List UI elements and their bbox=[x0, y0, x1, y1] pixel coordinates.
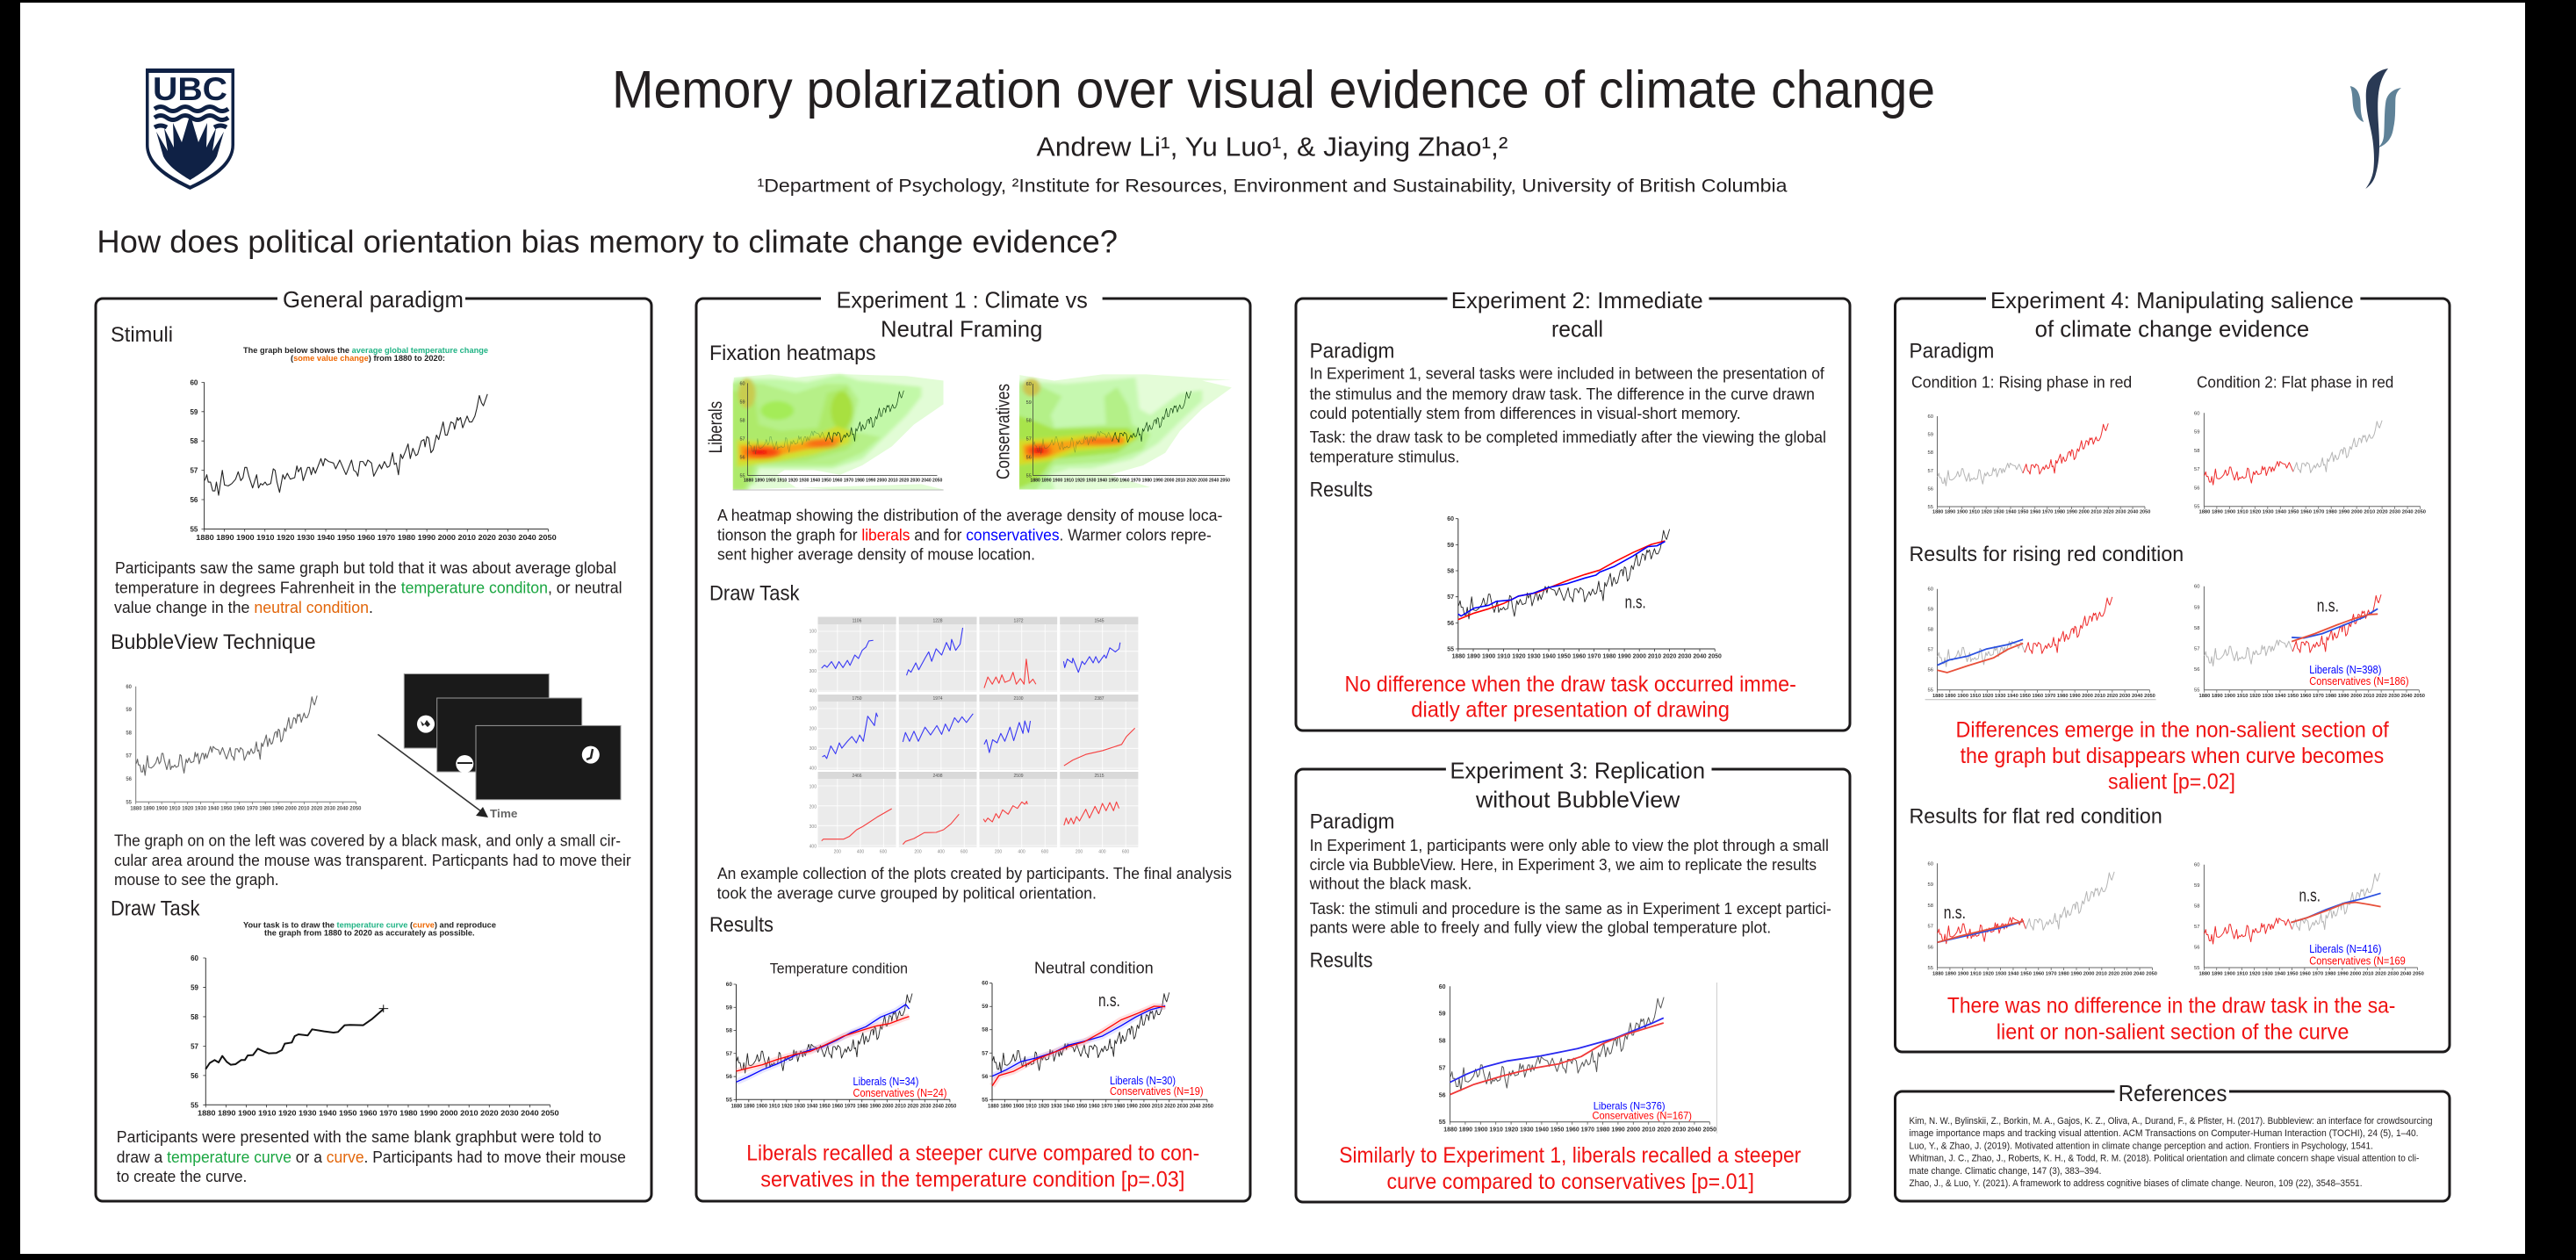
heatmap: liberals: 57 bbox=[739, 436, 745, 442]
chart: rising red, salient section: 55 bbox=[2194, 688, 2200, 694]
heading: draw task: Draw Task bbox=[709, 582, 800, 606]
chart: experiment 3 results bbox=[1439, 983, 1716, 1134]
stimulus instruction text: The graph below shows the average global temperature change bbox=[243, 346, 488, 356]
chart: experiment 2 results: 1880 1890 1900 1910 1920 1930 1940 1950 1960 1970 1980 1990 2000 2010 2020 2030 2040 2050 bbox=[1452, 653, 1722, 659]
chart: facet grid of participant drawings: 600 bbox=[1041, 850, 1048, 855]
chart: stimulus temperature curve: 1880 1890 1900 1910 1920 1930 1940 1950 1960 1970 1980 1990 2000 2010 2020 2030 2040 2050 bbox=[196, 534, 557, 542]
chart: bubbleview graph bbox=[126, 685, 362, 812]
chart: facet grid of participant drawings: 400 bbox=[809, 845, 817, 850]
panel title: experiment 1: Experiment 1 : Climate vs bbox=[837, 287, 1088, 313]
legend: rising red condition: Conservatives (N=186) bbox=[2309, 674, 2409, 688]
chart: facet grid of participant drawings: 200 bbox=[834, 850, 841, 855]
draw task instruction text bbox=[243, 921, 496, 939]
heading: fixation heatmaps: Fixation heatmaps bbox=[709, 342, 876, 365]
chart: flat phase in red stimulus: 60 bbox=[2194, 411, 2200, 416]
legend: neutral condition: Liberals (N=30) bbox=[1110, 1074, 1176, 1087]
chart: flat red, salient section: n.s. bbox=[1944, 904, 1966, 923]
chart: facet grid of participant drawings: 400 bbox=[1018, 850, 1025, 855]
chart: rising phase in red stimulus bbox=[1928, 414, 2150, 515]
chart: neutral condition results: 57 bbox=[982, 1050, 989, 1056]
text: heatmap description: tionson the graph for liberals and for conservatives. Warmer colors repre- bbox=[717, 525, 1212, 544]
text: experiment 2 paradigm: could potentially stem from differences in visual-short memory. bbox=[1310, 404, 1741, 422]
chart: facet grid of participant drawings: 200 bbox=[914, 850, 922, 855]
legend: neutral condition: Conservatives (N=19) bbox=[1110, 1084, 1203, 1098]
chart: rising red, salient section: 60 bbox=[2194, 585, 2200, 590]
conclusion: experiment 1: servatives in the temperature condition [p=.03] bbox=[760, 1168, 1184, 1192]
text: reference list: Luo, Y., & Zhao, J. (2019). Motivated attention in climate change perception and action. Frontiers in Psychology, 1541. bbox=[1909, 1141, 2373, 1151]
panel title: experiment 2: recall bbox=[1551, 315, 1603, 342]
chart: flat red, salient section bbox=[1928, 861, 2157, 977]
label: condition 1: Condition 1: Rising phase in red bbox=[1911, 373, 2132, 392]
chart: facet grid of participant drawings bbox=[809, 616, 1139, 855]
heatmap: conservatives: 57 bbox=[1026, 437, 1032, 443]
chart: rising phase in red stimulus: 60 bbox=[1928, 414, 1933, 420]
chart: facet grid of participant drawings: 400 bbox=[809, 689, 817, 695]
chart: facet grid of participant drawings: 300 bbox=[809, 746, 817, 752]
conclusion: experiment 2: diatly after presentation of drawing bbox=[1411, 698, 1730, 723]
panel: experiment 4 bbox=[1895, 287, 2450, 1052]
chart: rising phase in red stimulus: 57 bbox=[1928, 469, 1933, 474]
legend: flat red condition: Liberals (N=416) bbox=[2309, 942, 2381, 955]
chart: flat red, non-salient section: 59 bbox=[2194, 883, 2200, 889]
chart: neutral condition results: 58 bbox=[982, 1027, 989, 1033]
chart: experiment 3 results: 55 bbox=[1439, 1120, 1446, 1126]
chart: stimulus temperature curve: 57 bbox=[190, 467, 198, 475]
heatmap: conservatives: 55 bbox=[1026, 473, 1032, 479]
chart: rising red, non-salient section: 60 bbox=[1928, 587, 1933, 593]
text: experiment 2 paradigm: Task: the draw task to be completed immediatly after the viewing the global bbox=[1310, 428, 1826, 446]
chart: flat red, non-salient section: 60 bbox=[2194, 863, 2200, 868]
chart: example drawn curve: 59 bbox=[191, 983, 199, 992]
chart: rising red, salient section: 58 bbox=[2194, 626, 2200, 631]
text: bubbleview description: The graph on on the left was covered by a black mask, and only a small cir- bbox=[114, 831, 621, 849]
panel: experiment 2 bbox=[1296, 287, 1850, 731]
text: reference list: mate change. Climatic change, 147 (3), 383–394. bbox=[1909, 1166, 2101, 1177]
panel title: experiment 4 bbox=[1990, 287, 2354, 342]
chart: facet grid of participant drawings: 400 bbox=[1098, 850, 1106, 855]
panel: experiment 3 bbox=[1296, 758, 1850, 1202]
chart: facet grid of participant drawings: 1372 bbox=[1013, 619, 1024, 624]
panel title: experiment 1 bbox=[837, 287, 1088, 342]
chart: flat red, non-salient section: 57 bbox=[2194, 925, 2200, 930]
text: reference list bbox=[1909, 1116, 2432, 1189]
text: draw task description: to create the curve. bbox=[117, 1167, 247, 1185]
heading: results: Results bbox=[709, 913, 774, 937]
text: experiment 2 paradigm: the stimulus and the memory draw task. The difference in the curve drawn bbox=[1310, 385, 1815, 403]
panel: experiment 1 bbox=[696, 287, 1250, 1201]
chart: example drawn curve: 56 bbox=[191, 1072, 199, 1080]
title: Memory polarization over visual evidence of climate change bbox=[612, 61, 1935, 119]
research question heading: How does political orientation bias memory to climate change evidence? bbox=[97, 223, 1118, 259]
text: stimulus description bbox=[114, 558, 622, 616]
chart: rising phase in red stimulus: 59 bbox=[1928, 433, 1933, 438]
heatmap: liberals: 55 bbox=[739, 473, 745, 479]
chart: rising red, non-salient section: 56 bbox=[1928, 668, 1933, 673]
panel title: experiment 2 bbox=[1451, 287, 1703, 342]
chart: flat red, non-salient section: 56 bbox=[2194, 945, 2200, 950]
chart: rising phase in red stimulus: 56 bbox=[1928, 486, 1933, 492]
diagram: bubbleview mask screens over time: Time bbox=[490, 807, 518, 820]
chart: experiment 3 results: 59 bbox=[1439, 1012, 1446, 1018]
text: experiment 2 paradigm bbox=[1310, 364, 1826, 466]
chart: neutral condition results: 1880 1890 1900 1910 1920 1930 1940 1950 1960 1970 1980 1990 2000 2010 2020 2030 2040 2050 bbox=[988, 1104, 1213, 1110]
text: experiment 3 paradigm: without the black mask. bbox=[1309, 875, 1471, 893]
heading: paradigm: Paradigm bbox=[1909, 339, 1994, 363]
chart: facet grid of participant drawings: 1228 bbox=[932, 619, 943, 624]
chart: facet grid of participant drawings: 200 bbox=[809, 804, 817, 810]
conclusion: rising red condition: the graph but disappears when curve becomes bbox=[1961, 744, 2384, 768]
legend: rising red condition: Liberals (N=398) bbox=[2309, 663, 2381, 676]
legend: neutral condition bbox=[1110, 1074, 1203, 1098]
conclusion: experiment 2: No difference when the draw task occurred imme- bbox=[1345, 673, 1796, 697]
chart: facet grid of participant drawings: 200 bbox=[809, 650, 817, 655]
chart: stimulus temperature curve: 55 bbox=[190, 525, 198, 534]
legend: flat red condition bbox=[2309, 942, 2406, 967]
chart: facet grid of participant drawings: 400 bbox=[809, 767, 817, 772]
panel title: references: References bbox=[2119, 1080, 2227, 1106]
chart: rising red, salient section: 1880 1890 1900 1910 1920 1930 1940 1950 1960 1970 1980 1990 2000 2010 2020 2030 2040 2050 bbox=[2198, 694, 2425, 699]
heading: paradigm: Paradigm bbox=[1310, 339, 1394, 363]
chart: facet grid of participant drawings: 600 bbox=[880, 850, 887, 855]
chart: experiment 3 results: 60 bbox=[1439, 984, 1446, 990]
chart: example drawn curve: 57 bbox=[191, 1043, 199, 1051]
legend: temperature condition: Liberals (N=34) bbox=[853, 1075, 918, 1088]
chart: rising red, salient section: n.s. bbox=[2317, 597, 2339, 616]
text: bubbleview description bbox=[114, 831, 631, 889]
chart: rising red, salient section: 59 bbox=[2194, 605, 2200, 610]
affiliations: ¹Department of Psychology, ²Institute for Resources, Environment and Sustainability, University of British Columbia bbox=[757, 175, 1788, 196]
chart: rising red, non-salient section: 58 bbox=[1928, 628, 1933, 633]
chart title: neutral condition: Neutral condition bbox=[1034, 959, 1154, 976]
chart: flat red, salient section: 59 bbox=[1928, 882, 1933, 888]
chart: facet grid of participant drawings: 600 bbox=[961, 850, 968, 855]
chart: flat red, non-salient section: 1880 1890 1900 1910 1920 1930 1940 1950 1960 1970 1980 1990 2000 2010 2020 2030 2040 2050 bbox=[2198, 972, 2424, 977]
chart: stimulus temperature curve: 59 bbox=[190, 408, 198, 416]
stimulus instruction text bbox=[243, 346, 488, 364]
chart: experiment 2 results bbox=[1447, 516, 1722, 659]
label: liberals: Liberals bbox=[706, 401, 726, 453]
text: draw task example description bbox=[717, 864, 1232, 902]
chart: bubbleview graph: 60 bbox=[126, 685, 133, 690]
chart: facet grid of participant drawings: 2387 bbox=[1094, 696, 1105, 702]
chart: temperature condition results: 1880 1890 1900 1910 1920 1930 1940 1950 1960 1970 1980 1990 2000 2010 2020 2030 2040 2050 bbox=[731, 1104, 957, 1110]
panel title: general paradigm: General paradigm bbox=[283, 286, 464, 313]
chart: experiment 2 results: 57 bbox=[1447, 594, 1454, 601]
chart: facet grid of participant drawings: 400 bbox=[857, 850, 864, 855]
chart: facet grid of participant drawings: 200 bbox=[995, 850, 1002, 855]
chart: facet grid of participant drawings: 300 bbox=[809, 669, 817, 674]
heading: results for rising red condition: Results for rising red condition bbox=[1909, 543, 2184, 566]
chart: rising red, salient section: 56 bbox=[2194, 667, 2200, 673]
chart: facet grid of participant drawings: 2515 bbox=[1094, 774, 1105, 779]
conclusion: flat red condition bbox=[1947, 993, 2395, 1044]
text: draw task example description: took the average curve grouped by political orientation. bbox=[717, 883, 1097, 902]
chart: flat red, salient section: 58 bbox=[1928, 904, 1933, 909]
text: stimulus description: Participants saw the same graph but told that it was about average global bbox=[115, 558, 616, 577]
chart: facet grid of participant drawings: 1750 bbox=[852, 696, 862, 702]
text: bubbleview description: mouse to see the graph. bbox=[114, 870, 279, 889]
text: bubbleview description: cular area around the mouse was transparent. Particpants had to move their bbox=[114, 851, 631, 869]
chart: neutral condition results: 55 bbox=[982, 1097, 989, 1103]
chart: experiment 3 results: 1880 1890 1900 1910 1920 1930 1940 1950 1960 1970 1980 1990 2000 2010 2020 2030 2040 2050 bbox=[1443, 1127, 1716, 1134]
chart: example drawn curve: 60 bbox=[191, 954, 199, 962]
chart: example drawn curve: 58 bbox=[191, 1013, 199, 1021]
chart: rising red, non-salient section: 57 bbox=[1928, 648, 1933, 653]
chart: experiment 2 results: 59 bbox=[1447, 543, 1454, 549]
legend: experiment 3 bbox=[1593, 1099, 1692, 1121]
heading: bubbleview technique: BubbleView Technique bbox=[111, 630, 316, 654]
chart: neutral condition results: 59 bbox=[982, 1004, 989, 1010]
chart: bubbleview graph: 58 bbox=[126, 731, 133, 736]
chart: temperature condition results: 56 bbox=[726, 1074, 732, 1080]
heatmap: liberals bbox=[731, 374, 944, 491]
text: heatmap description: A heatmap showing the distribution of the average density of mouse loca- bbox=[717, 506, 1222, 524]
chart: facet grid of participant drawings: 2100 bbox=[1013, 696, 1024, 702]
chart: rising red, salient section bbox=[2194, 585, 2425, 699]
chart: rising red, salient section: 57 bbox=[2194, 646, 2200, 652]
text: stimulus description: value change in the neutral condition. bbox=[114, 598, 373, 616]
chart: facet grid of participant drawings: 1974 bbox=[932, 696, 943, 702]
text: experiment 3 paradigm: circle via BubbleView. Here, in Experiment 3, we aim to replicate the results bbox=[1310, 855, 1817, 874]
chart: facet grid of participant drawings: 200 bbox=[1076, 850, 1083, 855]
text: reference list: image importance maps and tracking visual attention. ACM Transactions on Computer-Human Interaction (TOCHI), 24 (5), 1–40. bbox=[1909, 1128, 2418, 1139]
conclusion: experiment 1 bbox=[746, 1141, 1199, 1192]
conclusion: rising red condition: Differences emerge in the non-salient section of bbox=[1956, 718, 2389, 743]
text: experiment 3 paradigm: Task: the stimuli and procedure is the same as in Experiment 1 except partici- bbox=[1310, 899, 1831, 918]
heading: paradigm: Paradigm bbox=[1310, 810, 1394, 833]
conclusion: flat red condition: lient or non-salient section of the curve bbox=[1997, 1019, 2349, 1044]
chart: facet grid of participant drawings: 1545 bbox=[1094, 619, 1105, 624]
chart: rising red, non-salient section: 59 bbox=[1928, 608, 1933, 613]
panel title: experiment 3: Experiment 3: Replication bbox=[1450, 758, 1705, 784]
heatmap: conservatives: 60 bbox=[1026, 382, 1032, 387]
heatmap: liberals: 59 bbox=[739, 400, 745, 405]
conclusion: experiment 3: Similarly to Experiment 1, liberals recalled a steeper bbox=[1339, 1143, 1801, 1168]
chart: flat red, salient section: 56 bbox=[1928, 945, 1933, 950]
chart: neutral condition results: n.s. bbox=[1098, 991, 1120, 1011]
authors: Andrew Li¹, Yu Luo¹, & Jiaying Zhao¹,² bbox=[1036, 132, 1508, 162]
text: experiment 3 paradigm bbox=[1309, 836, 1831, 937]
chart: neutral condition results bbox=[982, 981, 1213, 1110]
text: reference list: Kim, N. W., Bylinskii, Z., Borkin, M. A., Gajos, K. Z., Oliva, A., Durand, F., & Pfister, H. (2017). Bubbleview: an interface for crowdsourcing bbox=[1909, 1116, 2432, 1127]
chart: facet grid of participant drawings: 2498 bbox=[932, 774, 943, 779]
heatmap: conservatives: 59 bbox=[1026, 400, 1032, 406]
chart: facet grid of participant drawings: 2466 bbox=[852, 774, 862, 779]
conclusion: experiment 2 bbox=[1345, 673, 1796, 723]
chart: flat red, non-salient section bbox=[2194, 863, 2424, 977]
text: stimulus description: temperature in degrees Fahrenheit in the temperature conditon, or neutral bbox=[115, 578, 622, 596]
legend: experiment 3: Liberals (N=376) bbox=[1594, 1099, 1666, 1112]
conclusion: experiment 3 bbox=[1339, 1143, 1801, 1194]
chart: facet grid of participant drawings: 600 bbox=[1122, 850, 1129, 855]
chart: rising red, non-salient section: 55 bbox=[1928, 688, 1933, 694]
stimulus instruction text: (some value change) from 1880 to 2020: bbox=[291, 354, 445, 364]
conclusion: rising red condition: salient [p=.02] bbox=[2108, 769, 2235, 794]
text: experiment 2 paradigm: temperature stimulus. bbox=[1310, 448, 1459, 466]
icon: lab leaf logo bbox=[2350, 68, 2401, 189]
draw task instruction text: the graph from 1880 to 2020 as accurately as possible. bbox=[264, 929, 475, 939]
text: reference list: Zhao, J., & Luo, Y. (2021). A framework to address cognitive biases of climate change. Neuron, 109 (22), 3548–3551. bbox=[1909, 1178, 2362, 1189]
chart: bubbleview graph: 55 bbox=[126, 800, 133, 805]
legend: flat red condition: Conservatives (N=169 bbox=[2309, 954, 2406, 967]
chart: facet grid of participant drawings: 2509 bbox=[1013, 774, 1024, 779]
panel title: experiment 2: Experiment 2: Immediate bbox=[1451, 287, 1703, 313]
legend: rising red condition bbox=[2309, 663, 2409, 688]
heading: results for flat red condition: Results for flat red condition bbox=[1909, 805, 2162, 829]
heatmap: conservatives: 58 bbox=[1026, 419, 1032, 424]
chart: facet grid of participant drawings: 300 bbox=[809, 824, 817, 830]
chart: flat phase in red stimulus bbox=[2194, 411, 2426, 515]
chart: flat red, non-salient section: n.s. bbox=[2299, 887, 2321, 906]
chart: experiment 2 results: 60 bbox=[1447, 516, 1454, 522]
heatmap: liberals: 60 bbox=[739, 381, 745, 386]
chart: facet grid of participant drawings: 100 bbox=[809, 630, 817, 635]
conclusion: experiment 1: Liberals recalled a steeper curve compared to con- bbox=[746, 1141, 1199, 1166]
heatmap: liberals: 58 bbox=[739, 418, 745, 423]
chart: stimulus temperature curve bbox=[190, 378, 557, 542]
legend: temperature condition bbox=[853, 1075, 946, 1099]
panel title: experiment 3 bbox=[1450, 758, 1705, 812]
icon: UBC logo shield bbox=[146, 68, 234, 190]
chart: experiment 2 results: 56 bbox=[1447, 621, 1454, 627]
chart: neutral condition results: 56 bbox=[982, 1074, 989, 1080]
legend: experiment 3: Conservatives (N=167) bbox=[1593, 1109, 1692, 1121]
chart: bubbleview graph: 59 bbox=[126, 708, 133, 713]
chart: example drawn curve: 1880 1890 1900 1910 1920 1930 1940 1950 1960 1970 1980 1990 2000 2010 2020 2030 2040 2050 bbox=[198, 1110, 559, 1118]
chart: flat red, non-salient section: 55 bbox=[2194, 966, 2200, 971]
label: conservatives: Conservatives bbox=[994, 384, 1013, 479]
panel title: experiment 3: without BubbleView bbox=[1475, 786, 1680, 812]
draw task instruction text: Your task is to draw the temperature curve (curve) and reproduce bbox=[243, 921, 496, 931]
chart: stimulus temperature curve: 56 bbox=[190, 496, 198, 504]
chart: temperature condition results: 60 bbox=[726, 982, 732, 988]
chart: experiment 2 results: 58 bbox=[1447, 569, 1454, 574]
text: experiment 3 paradigm: pants were able to freely and fully view the global temperature plot. bbox=[1310, 918, 1771, 937]
chart: flat red, salient section: 1880 1890 1900 1910 1920 1930 1940 1950 1960 1970 1980 1990 2000 2010 2020 2030 2040 2050 bbox=[1932, 972, 2157, 977]
chart: flat phase in red stimulus: 59 bbox=[2194, 430, 2200, 436]
chart: temperature condition results: 58 bbox=[726, 1027, 732, 1034]
chart: rising phase in red stimulus: 55 bbox=[1928, 505, 1933, 510]
chart: neutral condition results: 60 bbox=[982, 981, 989, 987]
heatmap: liberals: 1880 1890 1900 1910 1920 1930 1940 1950 1960 1970 1980 1990 2000 2010 2020 2030 2040 2050 bbox=[744, 479, 942, 484]
text: reference list: Whitman, J. C., Zhao, J., Roberts, K. H., & Todd, R. M. (2018). Political orientation and climate concern shape visual attention to cli- bbox=[1909, 1154, 2420, 1164]
chart: stimulus temperature curve: 60 bbox=[190, 378, 198, 386]
chart: bubbleview graph: 57 bbox=[126, 754, 133, 760]
chart: temperature condition results: 55 bbox=[726, 1097, 732, 1103]
diagram: bubbleview mask screens over time bbox=[378, 674, 621, 820]
text: heatmap description bbox=[717, 506, 1222, 564]
text: heatmap description: sent higher average density of mouse location. bbox=[717, 544, 1035, 564]
chart: facet grid of participant drawings: 100 bbox=[809, 785, 817, 790]
chart: experiment 2 results: 55 bbox=[1447, 646, 1454, 653]
chart: temperature condition results: 57 bbox=[726, 1051, 732, 1057]
chart: flat phase in red stimulus: 57 bbox=[2194, 467, 2200, 472]
heatmap: conservatives: 56 bbox=[1026, 455, 1032, 460]
chart: flat phase in red stimulus: 56 bbox=[2194, 486, 2200, 491]
heading: results: Results bbox=[1310, 948, 1373, 972]
text: draw task description: draw a temperature curve or a curve. Participants had to move their mouse bbox=[117, 1148, 626, 1166]
chart: facet grid of participant drawings: 100 bbox=[809, 707, 817, 712]
conclusion: experiment 3: curve compared to conservatives [p=.01] bbox=[1387, 1170, 1754, 1194]
chart: flat phase in red stimulus: 1880 1890 1900 1910 1920 1930 1940 1950 1960 1970 1980 1990 2000 2010 2020 2030 2040 2050 bbox=[2198, 510, 2426, 515]
panel: general paradigm bbox=[96, 286, 651, 1201]
chart: experiment 3 results: 57 bbox=[1439, 1065, 1446, 1071]
chart: facet grid of participant drawings: 400 bbox=[938, 850, 945, 855]
chart: experiment 2 results: n.s. bbox=[1625, 594, 1646, 613]
chart: rising phase in red stimulus: 58 bbox=[1928, 450, 1933, 456]
chart: bubbleview graph: 1880 1890 1900 1910 1920 1930 1940 1950 1960 1970 1980 1990 2000 2010 2020 2030 2040 2050 bbox=[130, 807, 362, 812]
chart: experiment 3 results: 58 bbox=[1439, 1039, 1446, 1045]
heading: results: Results bbox=[1310, 478, 1373, 501]
icon: UBC logo shield: UBC bbox=[153, 71, 227, 107]
chart: flat red, non-salient section: 58 bbox=[2194, 904, 2200, 910]
text: draw task description: Participants were presented with the same blank graphbut were told to bbox=[117, 1127, 601, 1146]
heatmap: conservatives bbox=[1018, 374, 1232, 491]
chart: flat red, salient section: 57 bbox=[1928, 924, 1933, 929]
chart: stimulus temperature curve: 58 bbox=[190, 437, 198, 445]
chart: flat phase in red stimulus: 55 bbox=[2194, 505, 2200, 510]
chart: temperature condition results: 59 bbox=[726, 1004, 732, 1011]
chart: facet grid of participant drawings: 1106 bbox=[853, 619, 862, 624]
chart: flat phase in red stimulus: 58 bbox=[2194, 449, 2200, 454]
panel: references bbox=[1895, 1080, 2450, 1201]
chart: temperature condition results bbox=[726, 982, 957, 1110]
legend: temperature condition: Conservatives (N=24) bbox=[853, 1086, 946, 1099]
heatmap: liberals: 56 bbox=[739, 455, 745, 460]
chart: example drawn curve: 55 bbox=[191, 1101, 199, 1109]
panel title: experiment 4: Experiment 4: Manipulating salience bbox=[1990, 287, 2354, 313]
chart: rising red, non-salient section: 1880 1890 1900 1910 1920 1930 1940 1950 1960 1970 1980 1990 2000 2010 2020 2030 2040 2050 bbox=[1932, 694, 2155, 699]
text: experiment 2 paradigm: In Experiment 1, several tasks were included in between the presentation of bbox=[1310, 364, 1825, 383]
chart: bubbleview graph: 56 bbox=[126, 777, 133, 782]
chart: experiment 3 results: 56 bbox=[1439, 1092, 1446, 1098]
heading: stimuli: Stimuli bbox=[111, 323, 173, 347]
chart title: temperature condition: Temperature condition bbox=[770, 960, 908, 976]
heading: draw task: Draw Task bbox=[111, 897, 200, 921]
chart: flat red, salient section: 55 bbox=[1928, 966, 1933, 971]
label: condition 2: Condition 2: Flat phase in red bbox=[2197, 373, 2393, 392]
chart: rising phase in red stimulus: 1880 1890 1900 1910 1920 1930 1940 1950 1960 1970 1980 1990 2000 2010 2020 2030 2040 2050 bbox=[1932, 510, 2150, 515]
chart: rising red, non-salient section bbox=[1925, 587, 2156, 700]
chart: facet grid of participant drawings: 200 bbox=[809, 727, 817, 732]
chart: example drawn curve bbox=[191, 954, 559, 1118]
text: experiment 3 paradigm: In Experiment 1, participants were only able to view the plot through a small bbox=[1310, 836, 1829, 854]
text: draw task description bbox=[117, 1127, 626, 1185]
heatmap: conservatives: 1880 1890 1900 1910 1920 1930 1940 1950 1960 1970 1980 1990 2000 2010 2020 2030 2040 2050 bbox=[1031, 479, 1230, 484]
conclusion: flat red condition: There was no difference in the draw task in the sa- bbox=[1947, 993, 2395, 1018]
panel title: experiment 1: Neutral Framing bbox=[881, 316, 1042, 342]
panel title: experiment 4: of climate change evidence bbox=[2035, 315, 2309, 342]
text: draw task example description: An example collection of the plots created by participants. The final analysis bbox=[717, 864, 1232, 882]
conclusion: rising red condition bbox=[1956, 718, 2389, 794]
chart: flat red, salient section: 60 bbox=[1928, 861, 1933, 867]
